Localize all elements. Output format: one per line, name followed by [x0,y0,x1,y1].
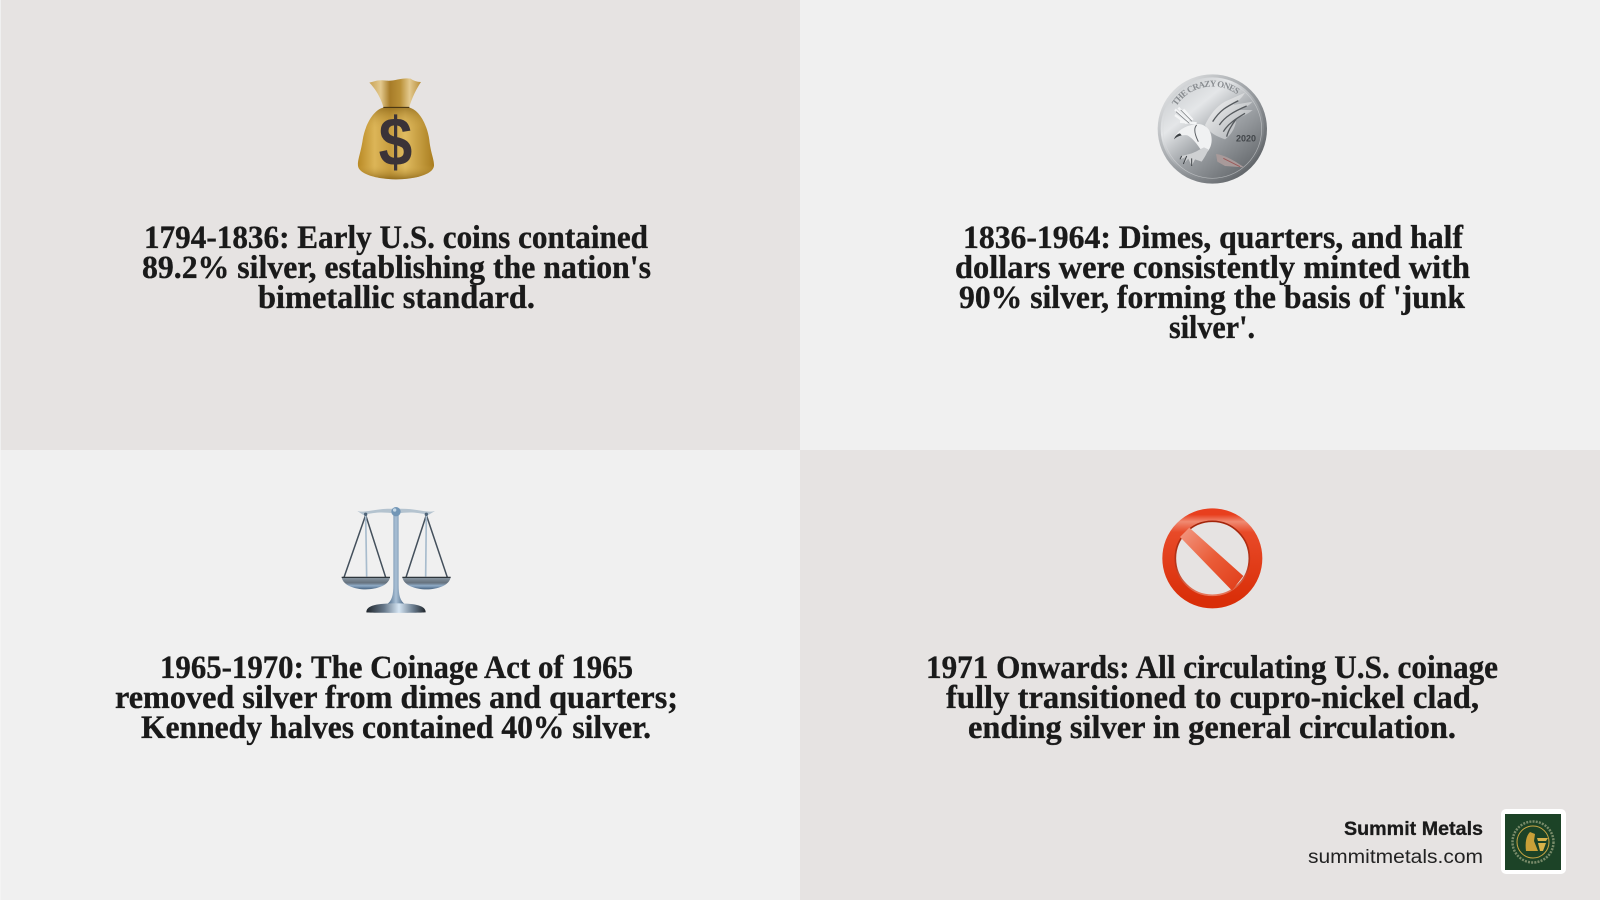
heading: 1836-1964 [955,220,1470,346]
heading: 1836-1964: silver'. [1169,310,1255,346]
heading: 1836-1964: 90% silver, forming the basis of 'junk [959,280,1466,316]
logo [1501,809,1566,874]
icon: silver eagle coin [1158,74,1267,184]
icon: money bag: $ [379,104,412,180]
heading: 1794-1836 [142,220,651,316]
icon: silver eagle coin: 2020 [1236,134,1256,144]
brand footer [1308,809,1566,874]
right wing feathers [1205,93,1253,139]
left wing feathers [1175,108,1197,123]
panel: 1971 onwards [800,450,1600,900]
panel: 1965-1970 Coinage Act [0,450,800,900]
icon: prohibited sign [1169,515,1256,602]
heading: 1971 onwards: 1971 Onwards: All circulating U.S. coinage [926,650,1498,686]
heading: 1794-1836: 1794-1836: Early U.S. coins contained [144,220,648,256]
icon: balance scales [342,507,451,613]
heading: 1971 onwards: ending silver in general circulation. [968,710,1456,746]
icon: money bag [358,78,434,180]
talons [1180,147,1208,166]
heading: 1965-1970: removed silver from dimes and quarters; [115,680,678,716]
panel: 1836-1964 90% silver [955,74,1470,346]
heading: 1971 onwards [926,650,1498,746]
tail [1216,154,1244,167]
head and body [1174,124,1212,154]
heading: 1794-1836: 89.2% silver, establishing the nation's [142,250,651,286]
heading: 1965-1970 [115,650,678,746]
icon: silver eagle coin: THE CRAZY ONES [1172,80,1240,105]
brand website: summitmetals.com [1308,847,1483,868]
heading: 1965-1970: 1965-1970: The Coinage Act of 1965 [160,650,633,686]
heading: 1836-1964: dollars were consistently minted with [955,250,1470,286]
heading: 1836-1964: 1836-1964: Dimes, quarters, and half [963,220,1464,256]
heading: 1971 onwards: fully transitioned to cupro-nickel clad, [946,680,1479,716]
heading: 1965-1970: Kennedy halves contained 40% silver. [141,710,651,746]
brand name: Summit Metals [1344,819,1483,840]
panel: 1794-1836 early coins [0,0,800,450]
heading: 1794-1836: bimetallic standard. [258,280,535,316]
